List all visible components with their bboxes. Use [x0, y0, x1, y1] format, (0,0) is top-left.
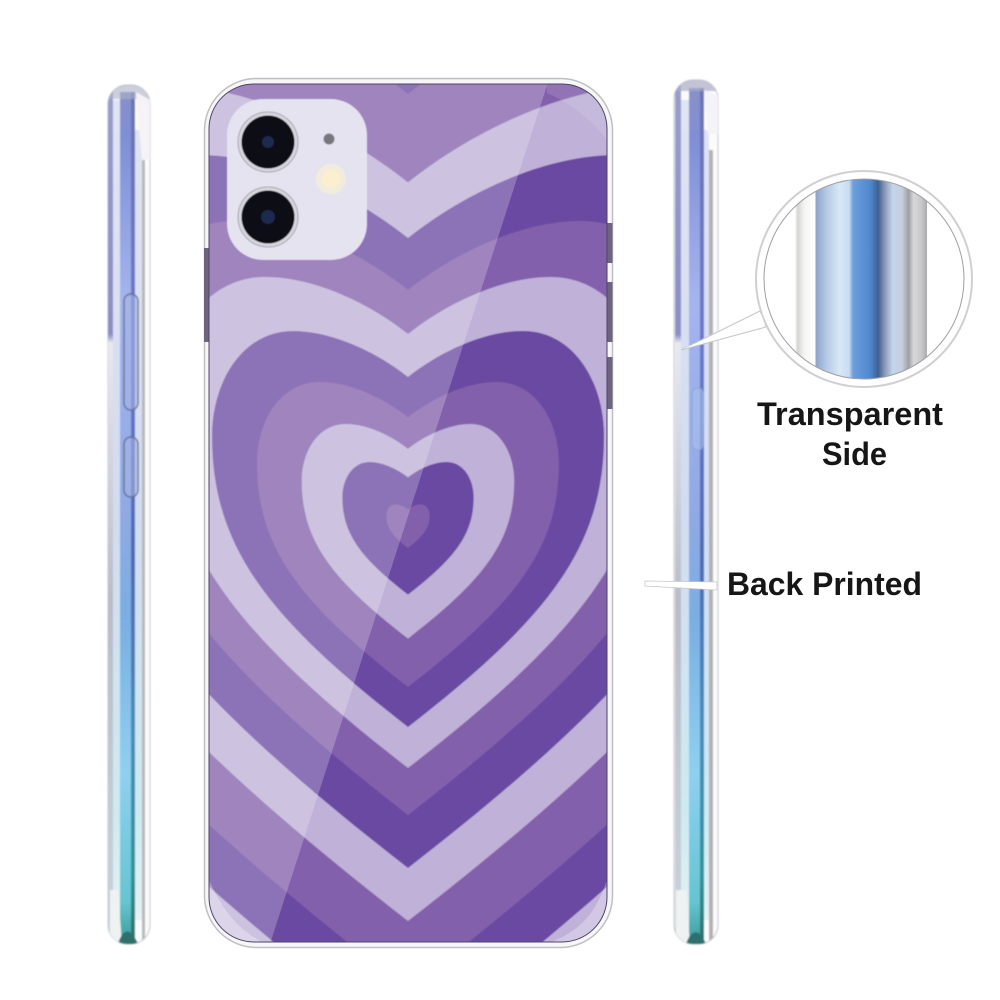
- microphone dot: [324, 134, 334, 144]
- glass reflection: [200, 70, 552, 950]
- phone case back: [204, 78, 614, 948]
- magnified side stripes: [795, 170, 927, 390]
- left side volume buttons: [124, 294, 138, 497]
- right side power button: [692, 388, 703, 450]
- label: Back Printed: Back Printed: [727, 566, 922, 602]
- right side view of phone case: [674, 80, 718, 944]
- upper camera lens: [238, 112, 298, 172]
- heart print artwork: [210, 84, 606, 942]
- callout: transparent side magnifier: [681, 170, 972, 390]
- left side view of phone case: [108, 85, 150, 944]
- camera flash: [316, 164, 346, 194]
- label: Transparent Side: Transparent: [757, 396, 943, 432]
- label: Transparent Side: Side: [822, 436, 887, 472]
- side button shadows: [204, 223, 612, 409]
- label: Transparent Side: [757, 396, 943, 472]
- camera module: [227, 99, 367, 260]
- lower camera lens: [238, 187, 298, 247]
- back printed pointer: [645, 581, 717, 590]
- callout pointer: [681, 311, 766, 350]
